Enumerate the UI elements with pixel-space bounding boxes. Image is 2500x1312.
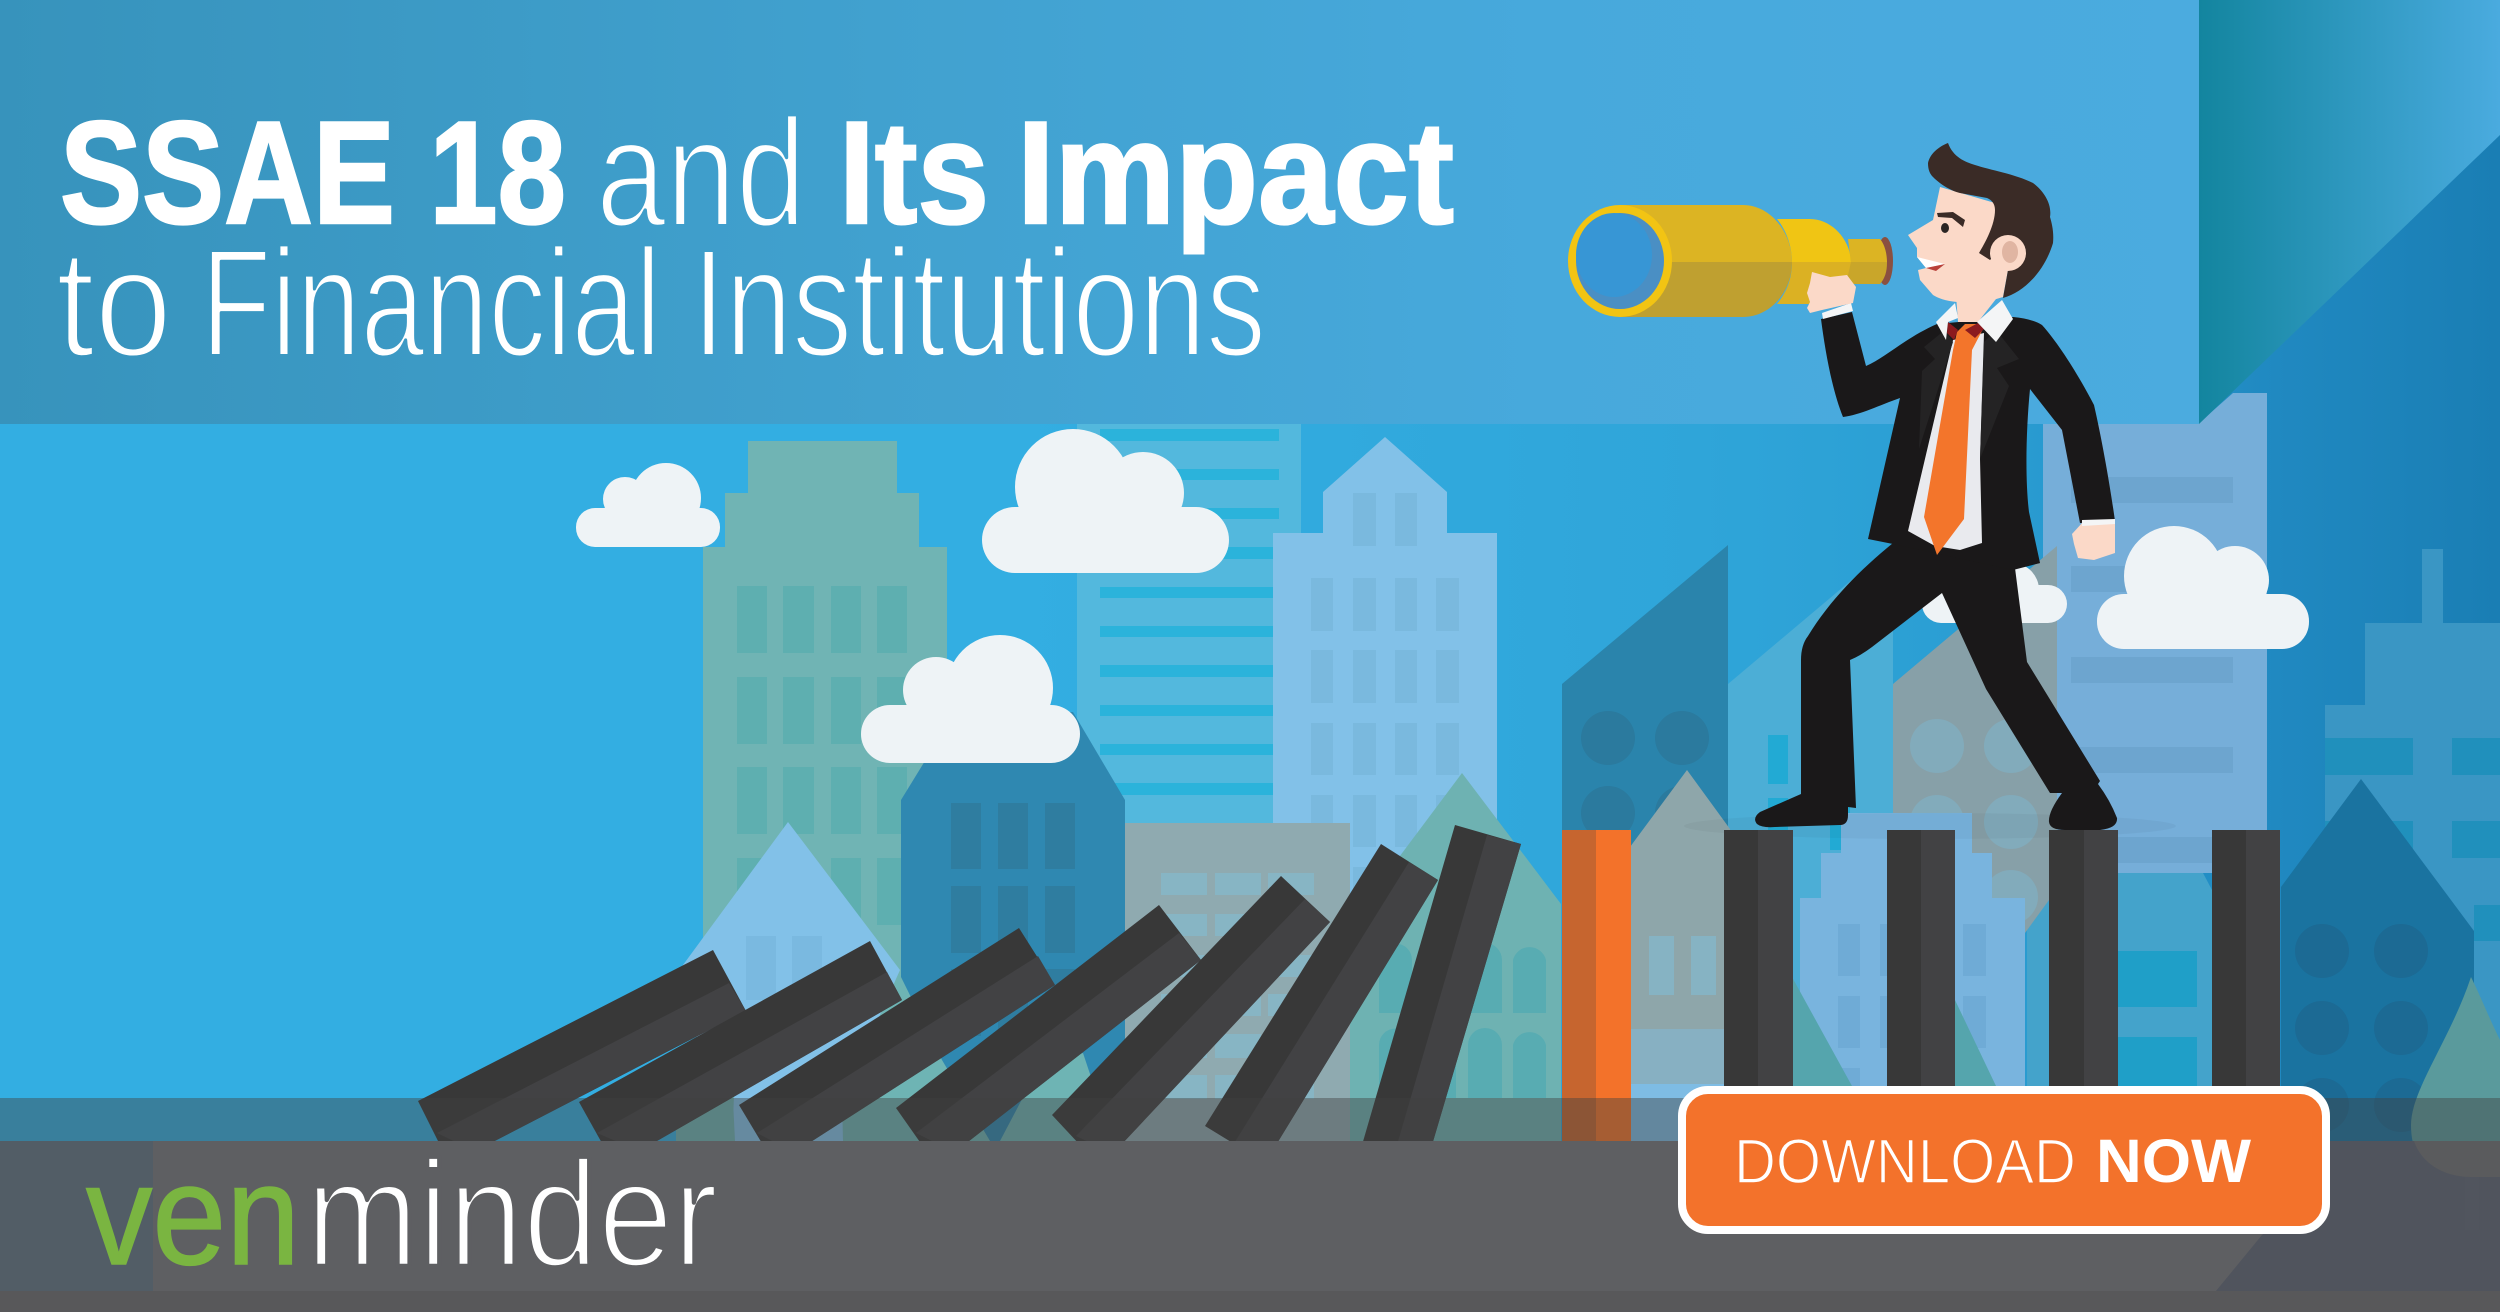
man right hand bbox=[2072, 521, 2115, 560]
man left hand bbox=[1807, 272, 1856, 313]
cloud: behind man bbox=[1922, 563, 2067, 623]
man jacket bbox=[1821, 312, 2115, 570]
tree: far right teardrop bbox=[2411, 977, 2500, 1177]
cloud: right of man bbox=[2097, 526, 2309, 649]
button shape bbox=[1682, 1090, 2326, 1230]
logo white part: minder bbox=[306, 1129, 718, 1298]
man left cuff bbox=[1822, 303, 1853, 319]
building: tall green tower bbox=[703, 441, 947, 1141]
building: slanted dark teal block bbox=[1562, 545, 1728, 1141]
translucent lower band bbox=[0, 1098, 2500, 1141]
subtitle: Institutions: Institutions bbox=[692, 217, 1266, 389]
title light: and: and bbox=[596, 87, 806, 259]
title bold: Impact: Impact bbox=[1017, 91, 1454, 254]
man inner ear bbox=[2002, 241, 2018, 263]
man face bbox=[1908, 187, 2008, 303]
man ear bbox=[1990, 235, 2026, 271]
man collar bbox=[1936, 300, 2013, 342]
man mouth bbox=[1917, 257, 1945, 268]
fallen dominoes bbox=[418, 825, 1521, 1145]
man tongue bbox=[1926, 264, 1945, 271]
building: large pale blue tower bbox=[2043, 393, 2267, 873]
man hair bbox=[1928, 143, 2053, 298]
building: teal arched house bbox=[1350, 773, 1561, 1141]
button label light: DOWNLOAD bbox=[1734, 1127, 2076, 1197]
title bbox=[56, 87, 1454, 389]
spyglass bbox=[1568, 205, 1893, 317]
building: slanted grey block bbox=[1893, 546, 2057, 933]
logo: venminder bbox=[86, 1129, 718, 1298]
man orange tie bbox=[1924, 324, 1983, 555]
man ground shadow bbox=[1684, 813, 2176, 839]
building: dark blue house bbox=[901, 712, 1125, 1141]
building: grey peaked house bbox=[1630, 770, 1730, 1141]
header band bbox=[0, 0, 2199, 424]
subtitle: Financial: Financial bbox=[201, 217, 661, 389]
bottom grey bar bbox=[0, 1141, 2500, 1312]
man neck bbox=[1956, 290, 2003, 322]
man eye bbox=[1941, 223, 1949, 233]
building: light blue spired tower bbox=[1273, 437, 1497, 1141]
man trousers bbox=[1755, 540, 2117, 830]
logo green part: ven bbox=[86, 1136, 300, 1295]
man right cuff bbox=[2082, 519, 2115, 526]
man: businessman with tie bbox=[1755, 143, 2117, 830]
title bold: Its: Its bbox=[839, 91, 989, 254]
standing dominoes bbox=[1724, 830, 2280, 1145]
cloud: lower centre bbox=[861, 635, 1080, 763]
cloud: small top left bbox=[576, 463, 720, 547]
man lapels bbox=[1919, 330, 2019, 459]
building: slanted cyan block bbox=[1728, 545, 1893, 1141]
cloud: large centre bbox=[982, 429, 1229, 573]
building: stepped pale blue block bbox=[1792, 813, 2025, 1141]
building: far right dark house bbox=[2281, 779, 2474, 1141]
building: cyan right block bbox=[2027, 873, 2212, 1141]
button label bold: NOW bbox=[2096, 1127, 2251, 1195]
building: grey low block bbox=[1125, 823, 1350, 1141]
building: light blue peaked house bbox=[660, 822, 1092, 1141]
top right teal wedge bbox=[2199, 0, 2500, 424]
download button bbox=[1682, 1090, 2326, 1230]
man shirt bbox=[1908, 333, 1984, 550]
subtitle: to: to bbox=[56, 217, 172, 389]
building: cyan striped tower bbox=[1077, 423, 1301, 1141]
building: far right stepped block bbox=[2325, 549, 2500, 1141]
orange domino bbox=[1562, 830, 1631, 1145]
man eyebrow bbox=[1937, 212, 1965, 227]
man tie knot shadow bbox=[1947, 322, 1984, 340]
title bold: SSAE 18: SSAE 18 bbox=[60, 91, 566, 254]
